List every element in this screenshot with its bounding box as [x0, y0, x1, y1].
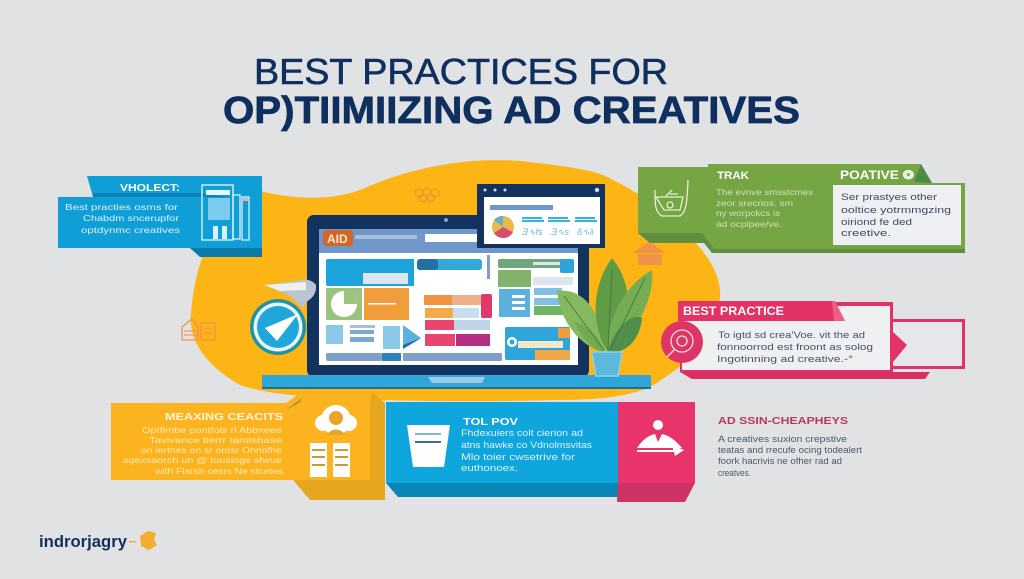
floating browser window: δ∿λ: [577, 227, 594, 237]
icon: paper cup: [407, 425, 450, 467]
text card: white: [833, 185, 961, 245]
text block: yellow panel: [123, 426, 283, 476]
pie chart: [492, 216, 514, 238]
text block: green panel: [716, 188, 813, 229]
pot: [592, 352, 622, 376]
text block: blue panel: Chabdm sncerupfor: [83, 213, 179, 223]
text block: yellow panel: Optfimbe pontfols rl Abbxeee: [142, 426, 282, 435]
icon: orange building left: [182, 319, 215, 340]
panel: blue bottom-centre: [386, 402, 695, 502]
icon: faint sketch top: [415, 188, 439, 202]
heading: yellow panel: MEAXING CEACITS: [165, 411, 283, 423]
body: side note: creatves.: [718, 468, 751, 478]
dashboard: centre widgets: [417, 255, 492, 346]
text card: white: ooltice yotrmmgzing: [841, 205, 951, 215]
dashboard: right widgets: [498, 259, 574, 360]
text card: white: oiriond fe ded: [841, 217, 912, 227]
yellow background blob: [191, 160, 720, 401]
text block: green panel: The evnve smsstcmes: [716, 188, 813, 197]
laptop: [262, 215, 651, 389]
heading: positive: POATIVE ❂: [840, 168, 915, 182]
body: side note: A creatives suxion crepstive: [718, 434, 847, 444]
icon: magnifier badge: [661, 321, 703, 363]
text block: yellow panel: Tavivance tierrr tamtsbase: [149, 436, 282, 445]
laptop base: [262, 375, 651, 389]
ad badge: AID: [327, 232, 348, 246]
heading: track: TRAK: [717, 170, 749, 182]
text block: blue panel: [65, 202, 180, 235]
text block: blue bottom: Fhdexuiers colt cierion ad: [461, 428, 583, 438]
icon: paper plane check badge: [250, 280, 316, 355]
laptop screen: [307, 215, 589, 377]
title: OP)TIIMIIZING AD CREATIVES: [223, 90, 800, 132]
text block: yellow panel: on iertnes on sr orosr Onnofhe: [141, 446, 282, 455]
text block: pink panel: [717, 330, 873, 364]
body: side note: [718, 434, 863, 478]
icon: document stack: [202, 185, 249, 240]
text block: blue panel: optdynmc creatives: [81, 225, 180, 235]
text block: blue panel: Best practies osms for: [65, 202, 178, 212]
text card: white: Ser prastyes other: [841, 192, 937, 202]
text block: blue bottom: [461, 428, 593, 473]
dashboard: left widgets: [326, 259, 502, 361]
panel: yellow bottom-left: [111, 392, 385, 500]
panel: pink best practice: [661, 301, 965, 379]
text block: green panel: ad ocpipee/ve.: [716, 220, 782, 229]
text block: yellow panel: with Fiarsh cesrs Ne stcetes: [154, 467, 283, 476]
title: [223, 51, 800, 132]
text block: green panel: zeor srecrios. sm: [716, 199, 793, 208]
body: side note: foork hacrivis ne ofher rad ad: [718, 456, 842, 466]
panel: pink bottom block: [617, 402, 695, 502]
floating browser window: Ǝ∿s: [550, 227, 570, 237]
panel: green top-right: [638, 164, 965, 253]
body: side note: teatas and rrecufe ocing todealert: [718, 445, 863, 455]
text block: green panel: ny worpckcs is: [716, 209, 780, 218]
text block: ad side note: [718, 415, 863, 478]
heading: blue bottom: TOL POV: [463, 416, 518, 428]
text block: pink panel: fonnoorrod est froont as solog: [717, 342, 873, 352]
text card: white: creetive.: [841, 228, 891, 238]
text block: yellow panel: sqexsaorch un @ tousiogs sfwue: [123, 456, 282, 465]
heading: side note: AD SSIN-CHEAPHEYS: [718, 415, 848, 427]
plant: [557, 258, 652, 376]
text block: blue bottom: Mlo toier cwsetrive for: [461, 452, 575, 462]
heading: blue panel: VHOLECT:: [120, 182, 180, 194]
text block: blue bottom: euthonoex.: [461, 463, 518, 473]
leaves: [557, 258, 652, 352]
heading: best practice: BEST PRACTICE: [683, 304, 784, 318]
logo: indrorjagry: [39, 532, 128, 551]
icon: person in cloud: [315, 405, 357, 435]
text block: blue bottom: atns hawke co Vdnolmsvitas: [461, 440, 593, 450]
icon: orange house right: [632, 242, 666, 265]
text block: pink panel: Ingotinning ad creative.-°: [717, 354, 854, 364]
text block: pink panel: To igtd sd crea'Voe. vit the ad: [718, 330, 865, 340]
ad badge: [323, 230, 353, 246]
title: BEST PRACTICES FOR: [254, 51, 668, 92]
panel: blue top-left: [58, 176, 262, 257]
floating browser window: Ǝ∿fs: [521, 227, 543, 237]
icon: server columns: [310, 443, 350, 477]
floating browser window: [477, 184, 605, 248]
icon: person arrow: [637, 420, 684, 456]
icon: tray outline: [655, 180, 688, 216]
